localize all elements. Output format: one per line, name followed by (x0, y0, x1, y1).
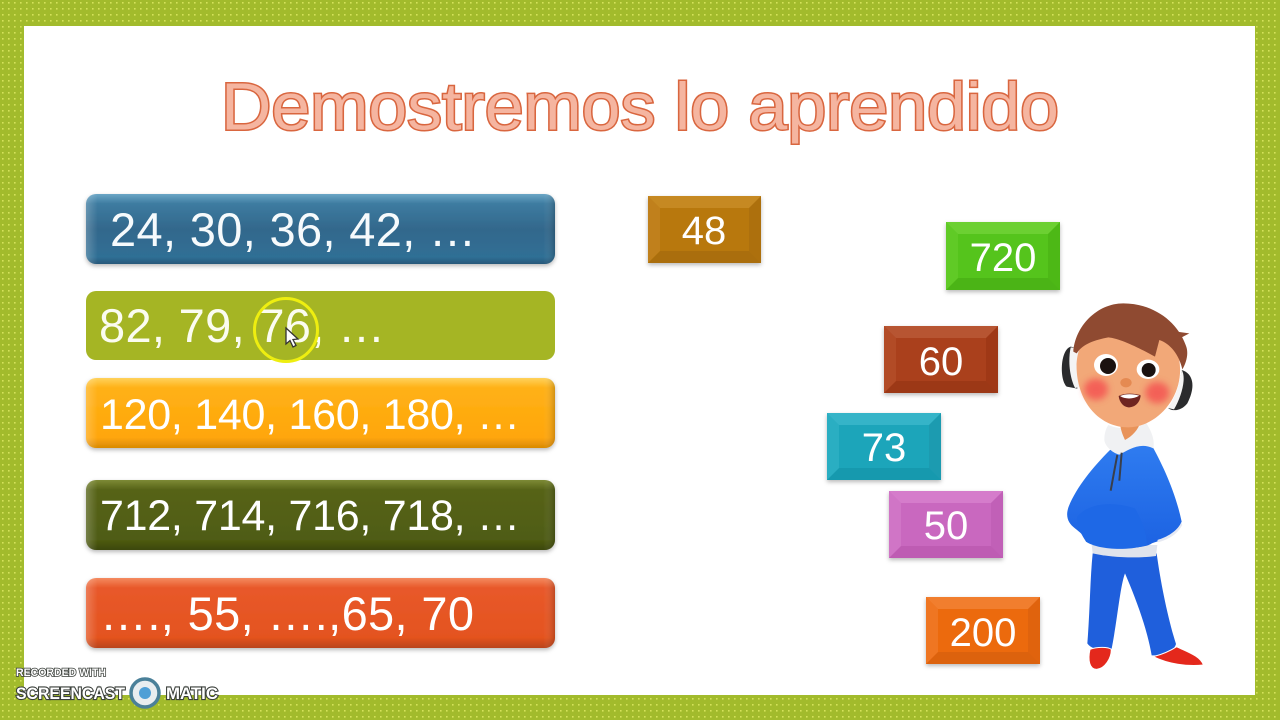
boy: nose (1120, 378, 1132, 387)
boy: left headphone (1062, 347, 1082, 389)
boy: neck (1120, 422, 1141, 440)
icon: mouse pointer (286, 328, 298, 347)
answer box 73 (827, 413, 941, 480)
boy: eyes (1094, 354, 1159, 379)
boy: hem (1092, 545, 1157, 557)
boy: hoodie pocket (1077, 504, 1147, 549)
bar: ...., 55, ....,65, 70 (86, 578, 555, 648)
answer box 50 (889, 491, 1003, 558)
bar: 24, 30, 36, 42 (86, 194, 555, 264)
watermark: Screencast-O-Matic: RECORDED WITH (16, 667, 106, 679)
boy: drawstrings (1111, 453, 1122, 491)
boy: hoodie (1067, 444, 1182, 548)
boy: cuff edge (1157, 523, 1182, 542)
watermark: Screencast-O-Matic: MATIC (166, 684, 218, 703)
answer box 48: 48 (682, 209, 726, 253)
answer box 200 (926, 597, 1040, 664)
boy: right headphone (1168, 370, 1192, 410)
boy: head (1077, 313, 1180, 427)
answer box 720: 720 (970, 236, 1036, 280)
cursor highlight circle (254, 298, 318, 362)
answer box 60: 60 (919, 340, 963, 384)
answer box 60 (884, 326, 998, 393)
answer box 73: 73 (862, 426, 906, 470)
bar: 120, 140, 160, 180 (86, 378, 555, 448)
boy: hood collar (1104, 423, 1154, 455)
boy: hair (1073, 303, 1187, 369)
boy: mouth (1119, 394, 1141, 407)
title: Demostremos lo aprendido (221, 70, 1059, 144)
boy: hair tuft (1177, 332, 1189, 337)
boy: cheeks (1084, 379, 1169, 403)
bar: ...., 55, ....,65, 70: …., 55, ….,65, 70 (100, 587, 474, 640)
bar: 712, 714, 716, 718: 712, 714, 716, 718, … (100, 492, 520, 540)
boy: shoes (1089, 647, 1203, 669)
boy: trousers (1087, 553, 1176, 655)
bar: 82, 79, 76: 82, 79, 76, … (99, 299, 385, 352)
bar: 82, 79, 76 (86, 291, 555, 360)
answer box 720 (946, 222, 1060, 290)
bar: 120, 140, 160, 180: 120, 140, 160, 180, … (100, 391, 520, 439)
answer box 50: 50 (924, 504, 968, 548)
answer box 200: 200 (950, 611, 1016, 655)
bar: 712, 714, 716, 718 (86, 480, 555, 550)
bar: 24, 30, 36, 42: 24, 30, 36, 42, … (110, 203, 476, 256)
watermark: Screencast-O-Matic: SCREENCAST (16, 684, 126, 703)
watermark: Screencast-O-Matic (16, 667, 218, 707)
illustration: boy with headphones (1062, 303, 1203, 669)
answer box 48 (648, 196, 761, 263)
